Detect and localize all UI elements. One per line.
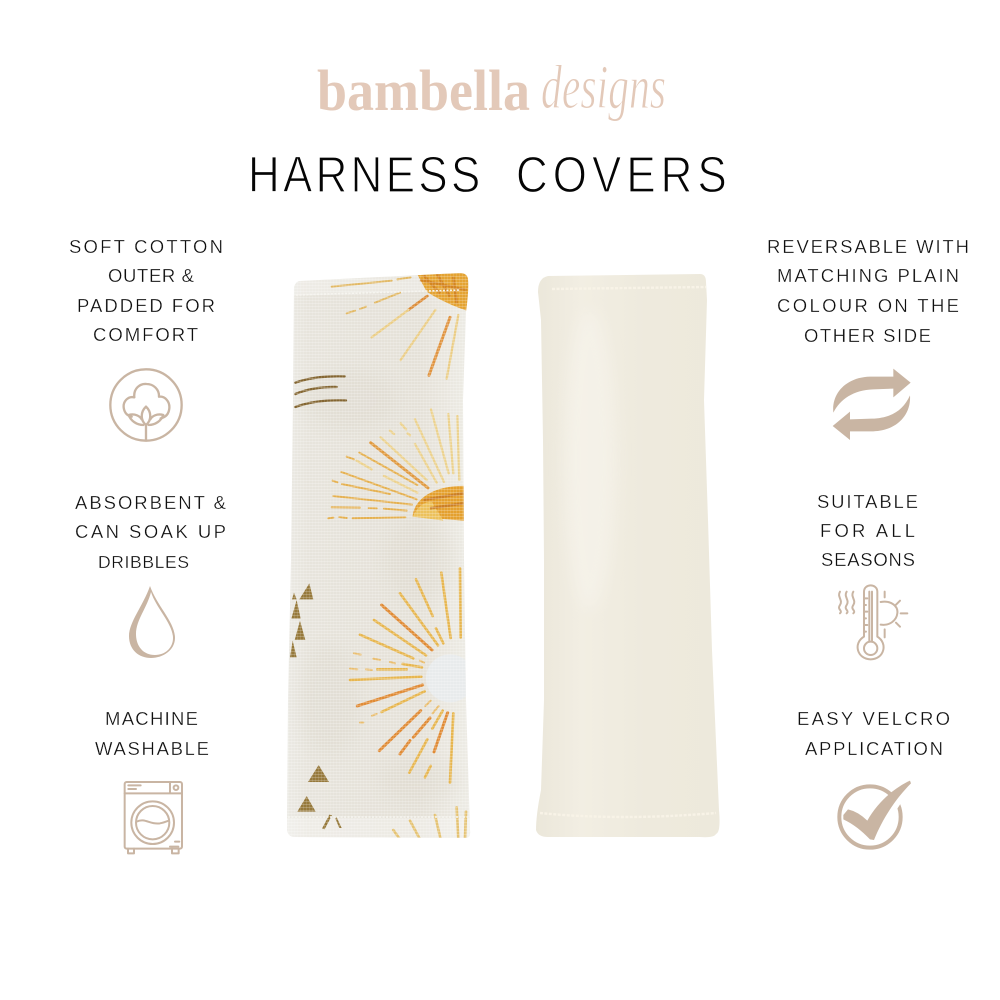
- logo: [317, 54, 666, 123]
- text: soft cotton: [69, 236, 223, 345]
- text: absorbent: DRIBBLES: [98, 552, 189, 572]
- text: absorbent: ABSORBENT &: [75, 492, 227, 513]
- sun: bottom: [426, 654, 474, 702]
- linen weave: [288, 273, 468, 838]
- text: absorbent: [75, 492, 227, 572]
- text: reversable: OTHER SIDE: [804, 325, 931, 346]
- panel: plain cover: [536, 274, 720, 837]
- title: COVERS: [516, 147, 727, 204]
- text: velcro: [797, 708, 950, 759]
- text: seasons: [817, 491, 918, 570]
- text: soft cotton: SOFT COTTON: [69, 236, 223, 257]
- icon: washing machine: [125, 782, 182, 853]
- icon: cotton: [110, 369, 182, 441]
- stitching: [288, 290, 468, 817]
- text: machine washable: [95, 708, 209, 759]
- text: reversable: COLOUR ON THE: [777, 295, 959, 316]
- panel: patterned cover: [287, 273, 470, 838]
- text: soft cotton: COMFORT: [93, 324, 198, 345]
- icon: reverse arrows: [833, 369, 911, 440]
- fabric base: [287, 274, 470, 838]
- stitching: [540, 287, 716, 817]
- text: seasons: SEASONS: [821, 549, 915, 570]
- text: seasons: FOR ALL: [820, 520, 915, 541]
- text: velcro: EASY VELCRO: [797, 708, 950, 729]
- text: soft cotton: OUTER &: [108, 265, 195, 286]
- title: HARNESS: [248, 147, 480, 204]
- triangles: [290, 583, 342, 829]
- icon: thermometer: [839, 585, 907, 659]
- text: machine washable: WASHABLE: [95, 738, 209, 759]
- text: reversable: MATCHING PLAIN: [777, 265, 959, 286]
- stripes: [295, 376, 346, 407]
- shading: [564, 310, 616, 610]
- text: seasons: SUITABLE: [817, 491, 918, 512]
- logo script: designs: [541, 54, 666, 122]
- text: reversable: [767, 236, 969, 346]
- text: velcro: APPLICATION: [805, 738, 943, 759]
- title: [248, 147, 727, 204]
- logo wordmark: bambella: [317, 58, 530, 123]
- text: soft cotton: PADDED FOR: [77, 295, 215, 316]
- icon: check mark: [839, 778, 913, 848]
- text: absorbent: CAN SOAK UP: [75, 521, 226, 542]
- hems: [307, 276, 426, 294]
- text: machine washable: MACHINE: [105, 708, 198, 729]
- sun: middle: [413, 486, 467, 521]
- icon: drop: [129, 586, 175, 658]
- sun: top: [418, 273, 468, 310]
- fabric plain: [536, 274, 720, 837]
- print: lower section: [290, 568, 474, 839]
- text: reversable: REVERSABLE WITH: [767, 236, 969, 257]
- print: upper section: [295, 270, 470, 521]
